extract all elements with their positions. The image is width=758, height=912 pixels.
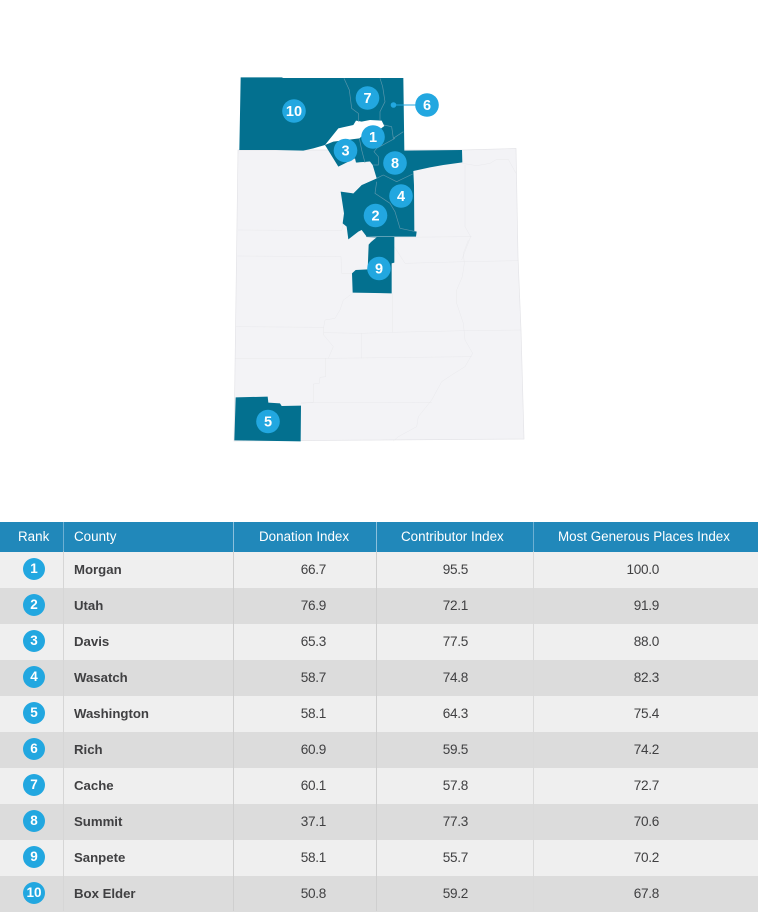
row 1 Morgan: Morgan: [74, 562, 122, 576]
row 9 Sanpete: 9: [30, 849, 38, 864]
row 4 Wasatch: 58.7: [301, 670, 326, 684]
badge 6: [415, 93, 439, 117]
badge 2: 2: [371, 208, 380, 224]
row 7 Cache: Cache: [74, 778, 114, 792]
table header: County: [74, 529, 116, 544]
row 1 Morgan: 66.7: [301, 562, 326, 576]
badge 9: 9: [375, 262, 383, 278]
row 2 Utah: 91.9: [634, 598, 659, 612]
row 9 Sanpete: Sanpete: [74, 850, 125, 864]
row 3 Davis: Davis: [74, 634, 109, 648]
row 7 Cache: 72.7: [634, 778, 659, 792]
county borders inside highlighted area: [344, 78, 416, 238]
row 1 Morgan: [0, 552, 758, 588]
Salt Lake area: [341, 162, 377, 193]
badge 1: 1: [369, 130, 377, 146]
badge 9: [367, 257, 391, 280]
row 10 Box Elder: 10: [26, 885, 42, 900]
table header: Contributor Index: [401, 529, 504, 544]
row 6 Rich: Rich: [74, 742, 103, 756]
badge 3: 3: [341, 144, 350, 160]
row 2 Utah: 76.9: [301, 598, 326, 612]
badge 6: 6: [423, 98, 431, 114]
row 7 Cache: 60.1: [301, 778, 326, 792]
badge 4: 4: [397, 189, 405, 205]
row 10 Box Elder: 59.2: [443, 886, 468, 900]
row 3 Davis: 77.5: [443, 634, 468, 648]
row 5 Washington: 75.4: [634, 706, 659, 720]
map of Utah counties: [234, 77, 524, 442]
row 4 Wasatch: [0, 660, 758, 696]
row 5 Washington: 64.3: [443, 706, 468, 720]
row 9 Sanpete: [0, 840, 758, 876]
badge 8: 8: [391, 156, 399, 172]
highlighted northern counties: [239, 77, 462, 239]
highlighted county: Washington: [234, 397, 301, 441]
badge 8: [383, 151, 407, 175]
badge 7: [356, 86, 379, 110]
table header: Most Generous Places Index: [558, 529, 730, 544]
badge 2: [364, 204, 387, 227]
row 3 Davis: [0, 624, 758, 660]
row 1 Morgan: 100.0: [626, 562, 659, 576]
state base in light gray: [234, 148, 524, 441]
badge 7: 7: [363, 91, 372, 107]
row 4 Wasatch: 4: [30, 669, 38, 684]
row 8 Summit: Summit: [74, 814, 122, 828]
row 3 Davis: 3: [30, 633, 38, 648]
row 8 Summit: 8: [30, 813, 38, 828]
row 3 Davis: 65.3: [301, 634, 326, 648]
badge 5: [256, 410, 280, 433]
badge 3: [334, 139, 357, 162]
row 9 Sanpete: 70.2: [634, 850, 659, 864]
row 1 Morgan: 95.5: [443, 562, 468, 576]
badge 10: [282, 99, 306, 123]
table header: Rank: [18, 529, 49, 544]
table header: [0, 522, 758, 552]
highlighted county: Sanpete: [352, 237, 394, 293]
row 2 Utah: Utah: [74, 598, 103, 612]
row 6 Rich: 60.9: [301, 742, 326, 756]
row 5 Washington: Washington: [74, 706, 149, 720]
row 5 Washington: [0, 696, 758, 732]
badge 5: 5: [264, 414, 272, 430]
row 2 Utah: [0, 588, 758, 624]
row 8 Summit: 70.6: [634, 814, 659, 828]
badge 10: 10: [286, 104, 302, 120]
lake cut-out: [325, 120, 384, 145]
row 4 Wasatch: 82.3: [634, 670, 659, 684]
table header: Donation Index: [259, 529, 349, 544]
row 6 Rich: 59.5: [443, 742, 468, 756]
row 2 Utah: 72.1: [443, 598, 468, 612]
row 8 Summit: 77.3: [443, 814, 468, 828]
county borders in gray: [235, 159, 521, 441]
row 5 Washington: 58.1: [301, 706, 326, 720]
row 10 Box Elder: 67.8: [634, 886, 659, 900]
row 7 Cache: [0, 768, 758, 804]
row 6 Rich: 74.2: [634, 742, 659, 756]
row 3 Davis: 88.0: [634, 634, 659, 648]
row 6 Rich: [0, 732, 758, 768]
ranking table: [0, 522, 758, 912]
row 8 Summit: [0, 804, 758, 840]
badge 4: [389, 184, 413, 208]
row 5 Washington: 5: [30, 705, 38, 720]
row 10 Box Elder: 50.8: [301, 886, 326, 900]
row 10 Box Elder: [0, 876, 758, 912]
badge 1: [361, 125, 385, 149]
row 9 Sanpete: 55.7: [443, 850, 468, 864]
row 8 Summit: 37.1: [301, 814, 326, 828]
row 10 Box Elder: Box Elder: [74, 886, 136, 900]
row 1 Morgan: 1: [30, 561, 38, 576]
row 4 Wasatch: 74.8: [443, 670, 468, 684]
callout leader for Rich: [391, 102, 420, 108]
row 2 Utah: 2: [30, 597, 38, 612]
row 4 Wasatch: Wasatch: [74, 670, 128, 684]
row 9 Sanpete: 58.1: [301, 850, 326, 864]
row 7 Cache: 7: [30, 777, 38, 792]
row 7 Cache: 57.8: [443, 778, 468, 792]
row 6 Rich: 6: [30, 741, 38, 756]
